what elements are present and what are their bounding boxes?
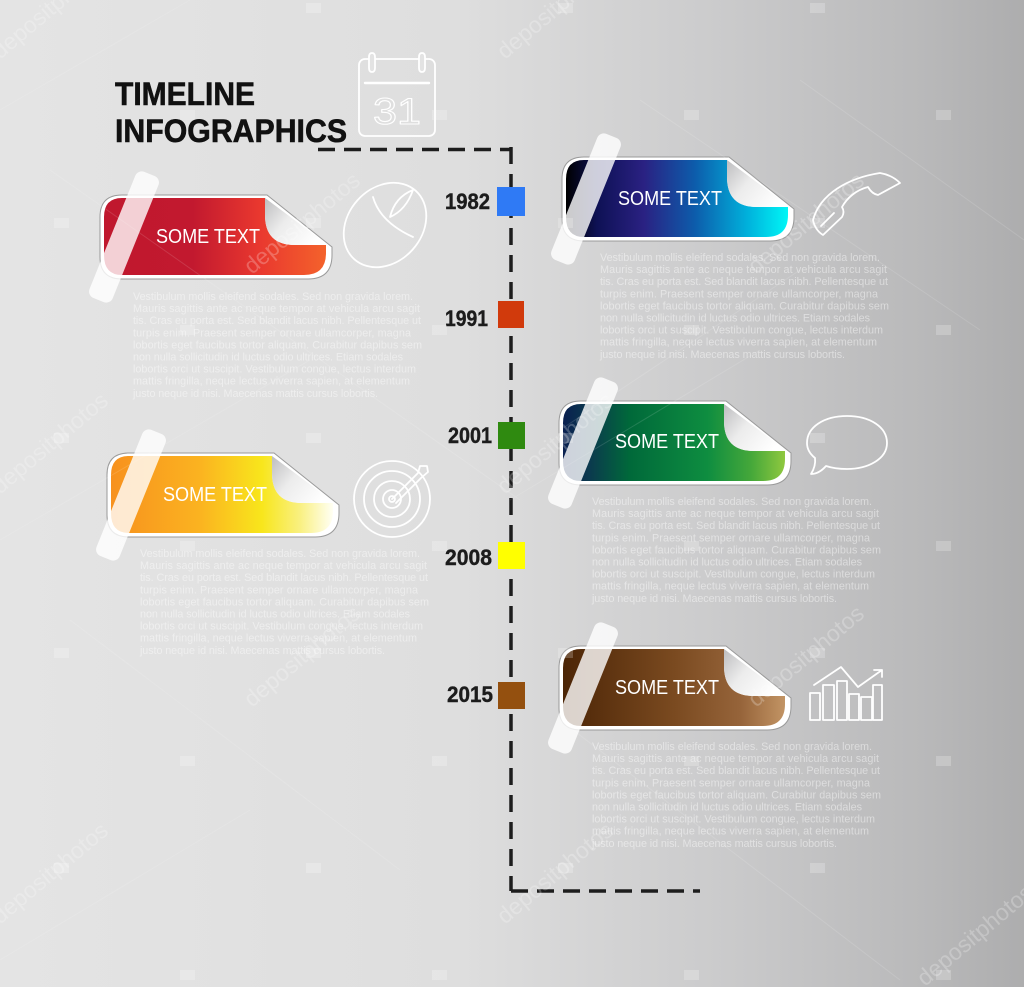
title: INFOGRAPHICS (115, 113, 347, 149)
marker: 1991 (445, 301, 524, 331)
marker: 2015 (447, 682, 525, 709)
body text: orange panel: Mauris sagittis ante ac neque tempor at vehicula arcu sagit (140, 560, 427, 572)
marker: 1991: 1991 (445, 306, 488, 331)
body text: orange panel: turpis enim. Praesent semper ornare ullamcorper, magna (140, 584, 418, 596)
marker: 1982: 1982 (445, 189, 490, 214)
body text: red panel: non nulla sollicitudin id luctus odio ultrices. Etiam sodales (133, 352, 404, 364)
body text: brown panel: Vestibulum mollis eleifend sodales. Sed non gravida lorem. (592, 741, 872, 753)
watermark: depositphotos (492, 387, 618, 499)
icon: calendar: 31 (373, 91, 421, 132)
body text: blue panel: lobortis orci ut suscipit. Vestibulum congue, lectus interdum (600, 325, 883, 337)
title (115, 76, 347, 149)
body text: blue panel: Mauris sagittis ante ac neque tempor at vehicula arcu sagit (600, 264, 887, 276)
timeline dashed line (318, 147, 700, 891)
body text: green panel: justo neque id nisi. Maecenas mattis cursus lobortis. (591, 593, 837, 605)
body text: green panel: mattis fringilla, neque lectus viverra sapien, at elementum (592, 581, 869, 593)
body text: green panel: lobortis eget faucibus tortor aliquam. Curabitur dapibus sem (592, 544, 881, 556)
body text: green panel: non nulla sollicitudin id luctus odio ultrices. Etiam sodales (592, 556, 863, 568)
body text: green panel: turpis enim. Praesent semper ornare ullamcorper, magna (592, 532, 870, 544)
watermark: depositphotos (239, 167, 365, 279)
body text: red panel: lobortis eget faucibus tortor aliquam. Curabitur dapibus sem (133, 339, 422, 351)
icon: target (354, 461, 430, 537)
body text: blue panel (599, 252, 889, 361)
body text: green panel (591, 496, 881, 605)
body text: red panel: justo neque id nisi. Maecenas mattis cursus lobortis. (132, 388, 378, 400)
marker: 1982 (445, 187, 525, 216)
body text: blue panel: justo neque id nisi. Maecenas mattis cursus lobortis. (599, 349, 845, 361)
body text: brown panel: lobortis eget faucibus tortor aliquam. Curabitur dapibus sem (592, 789, 881, 801)
body text: orange panel: justo neque id nisi. Maecenas mattis cursus lobortis. (139, 645, 385, 657)
body text: orange panel: lobortis orci ut suscipit. Vestibulum congue, lectus interdum (140, 621, 423, 633)
watermark: depositphotos (239, 600, 365, 712)
marker: 2008 (445, 542, 525, 570)
body text: red panel: Vestibulum mollis eleifend sodales. Sed non gravida lorem. (133, 291, 413, 303)
body text: blue panel: mattis fringilla, neque lectus viverra sapien, at elementum (600, 337, 877, 349)
body text: blue panel: turpis enim. Praesent semper ornare ullamcorper, magna (600, 288, 878, 300)
body text: orange panel: mattis fringilla, neque lectus viverra sapien, at elementum (140, 633, 417, 645)
sticker: orange: SOME TEXT (163, 484, 267, 506)
body text: red panel (132, 291, 422, 400)
icon: mouse (327, 166, 443, 284)
icon: calendar (359, 53, 435, 136)
icon: bar chart (810, 667, 882, 720)
body text: blue panel: tis. Cras eu porta est. Sed blandit lacus nibh. Pellentesque ut (600, 276, 888, 288)
body text: red panel: turpis enim. Praesent semper ornare ullamcorper, magna (133, 327, 411, 339)
body text: red panel: mattis fringilla, neque lectus viverra sapien, at elementum (133, 376, 410, 388)
sticker: red: SOME TEXT (156, 226, 260, 248)
watermark: depositphotos (743, 167, 869, 279)
body text: brown panel: mattis fringilla, neque lectus viverra sapien, at elementum (592, 826, 869, 838)
body text: orange panel: tis. Cras eu porta est. Sed blandit lacus nibh. Pellentesque ut (140, 572, 428, 584)
body text: brown panel: non nulla sollicitudin id luctus odio ultrices. Etiam sodales (592, 802, 863, 814)
body text: orange panel: non nulla sollicitudin id luctus odio ultrices. Etiam sodales (140, 608, 411, 620)
body text: brown panel: Mauris sagittis ante ac neque tempor at vehicula arcu sagit (592, 753, 879, 765)
sticker: blue (549, 131, 794, 267)
body text: green panel: Vestibulum mollis eleifend sodales. Sed non gravida lorem. (592, 496, 872, 508)
marker: 2001 (448, 422, 525, 449)
body text: brown panel: justo neque id nisi. Maecenas mattis cursus lobortis. (591, 838, 837, 850)
body text: brown panel (591, 741, 881, 850)
body text: red panel: tis. Cras eu porta est. Sed blandit lacus nibh. Pellentesque ut (133, 315, 421, 327)
sticker: green: SOME TEXT (615, 431, 719, 453)
body text: green panel: tis. Cras eu porta est. Sed blandit lacus nibh. Pellentesque ut (592, 520, 880, 532)
body text: blue panel: Vestibulum mollis eleifend sodales. Sed non gravida lorem. (600, 252, 880, 264)
icon: speech bubble (807, 416, 887, 474)
body text: orange panel: Vestibulum mollis eleifend sodales. Sed non gravida lorem. (140, 548, 420, 560)
sticker: blue: SOME TEXT (618, 188, 722, 210)
sticker: brown (546, 620, 791, 756)
marker: 2015: 2015 (447, 682, 493, 707)
sticker: green (546, 375, 791, 511)
body text: green panel: lobortis orci ut suscipit. Vestibulum congue, lectus interdum (592, 569, 875, 581)
marker: 2001: 2001 (448, 423, 492, 448)
sticker: brown: SOME TEXT (615, 677, 719, 699)
body text: orange panel: lobortis eget faucibus tortor aliquam. Curabitur dapibus sem (140, 596, 429, 608)
sticker: orange (94, 427, 339, 563)
title: TIMELINE (115, 76, 255, 112)
marker: 2008: 2008 (445, 545, 492, 570)
body text: red panel: lobortis orci ut suscipit. Vestibulum congue, lectus interdum (133, 364, 416, 376)
body text: green panel: Mauris sagittis ante ac neque tempor at vehicula arcu sagit (592, 508, 879, 520)
body text: brown panel: tis. Cras eu porta est. Sed blandit lacus nibh. Pellentesque ut (592, 765, 880, 777)
watermark: depositphotos (743, 600, 869, 712)
body text: blue panel: non nulla sollicitudin id luctus odio ultrices. Etiam sodales (600, 312, 871, 324)
sticker: red (87, 169, 332, 305)
body text: brown panel: turpis enim. Praesent semper ornare ullamcorper, magna (592, 777, 870, 789)
body text: orange panel (139, 548, 429, 657)
watermark: depositphotos (492, 817, 618, 929)
body text: red panel: Mauris sagittis ante ac neque tempor at vehicula arcu sagit (133, 303, 420, 315)
body text: blue panel: lobortis eget faucibus tortor aliquam. Curabitur dapibus sem (600, 300, 889, 312)
icon: phone (813, 173, 900, 235)
body text: brown panel: lobortis orci ut suscipit. Vestibulum congue, lectus interdum (592, 814, 875, 826)
